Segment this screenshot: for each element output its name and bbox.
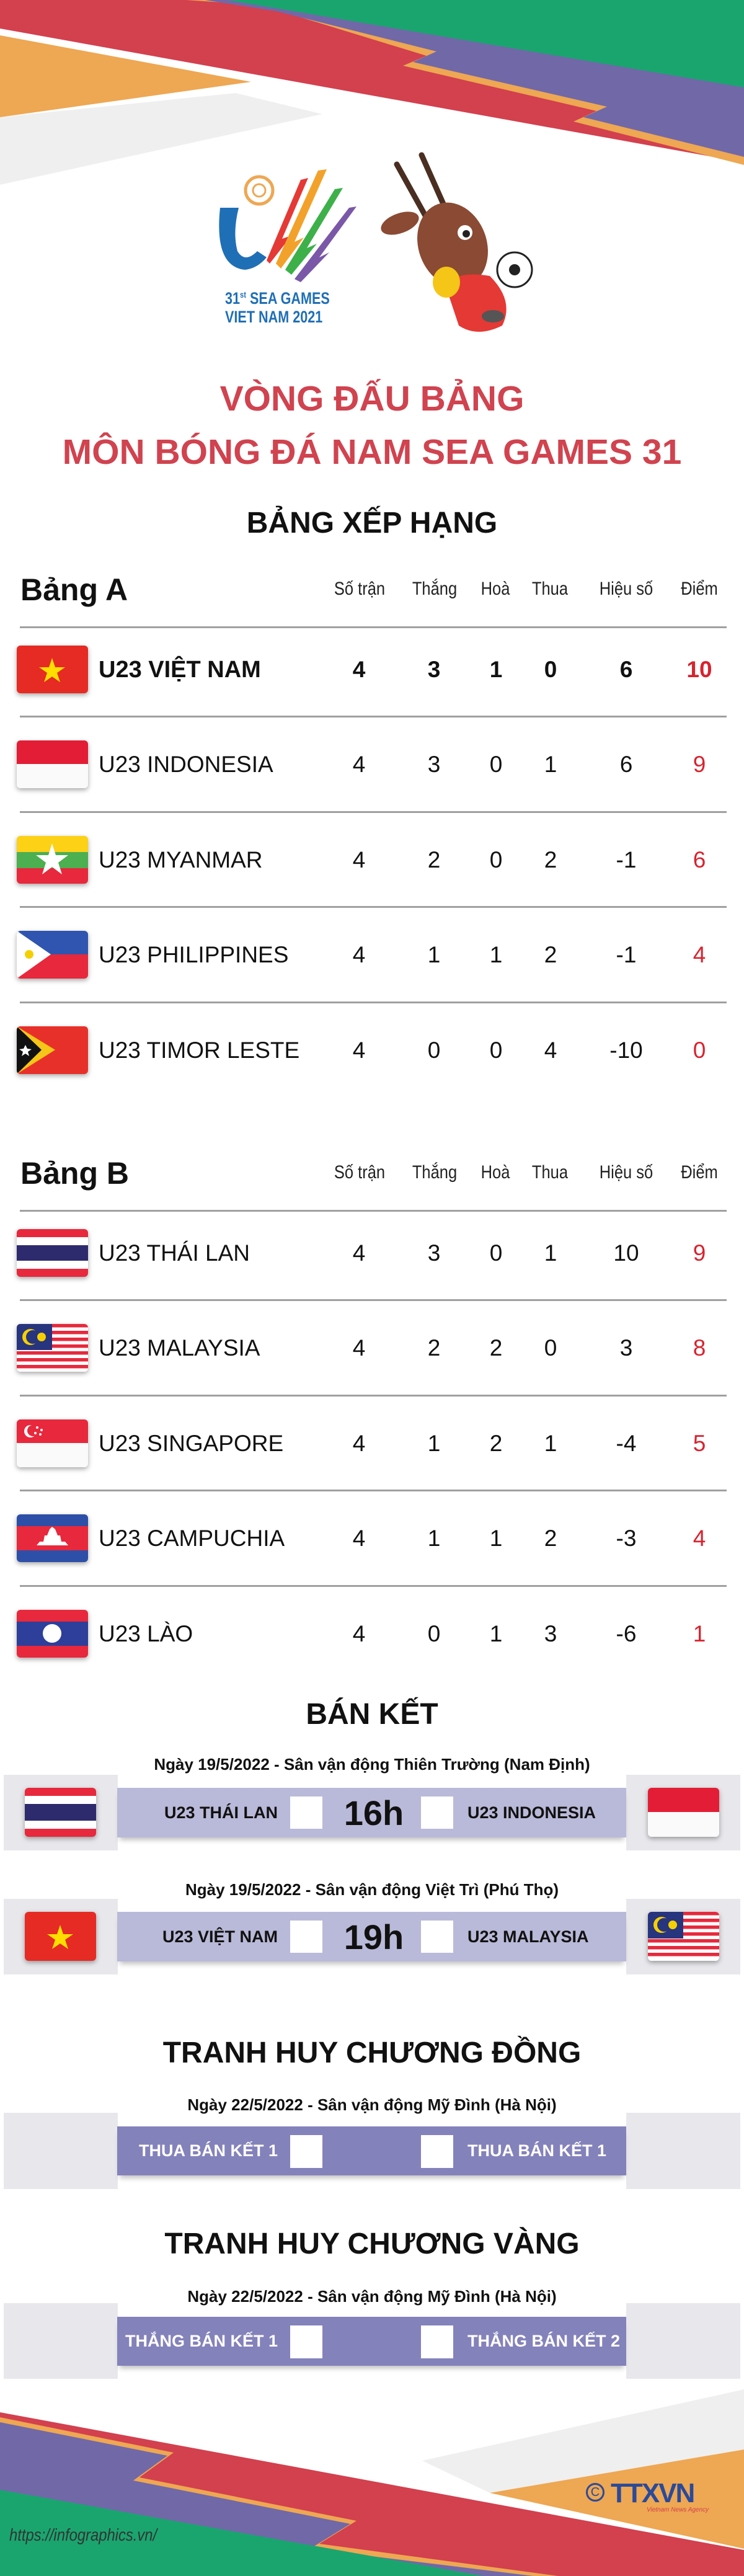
panel: semifinal 2 xyxy=(4,1880,740,1974)
column headers B: Số trận xyxy=(334,1162,385,1183)
mascot xyxy=(381,153,533,332)
row: Indonesia: 9 xyxy=(693,752,706,777)
row: Singapore: U23 SINGAPORE xyxy=(99,1431,283,1456)
column headers: Hoà xyxy=(481,579,510,599)
row: Campuchia: 1 xyxy=(490,1526,502,1551)
row: Timor Leste: -10 xyxy=(609,1037,643,1063)
row: Thai Lan xyxy=(14,1228,706,1282)
column headers B: Hiệu số xyxy=(600,1162,653,1183)
row: Timor Leste: U23 TIMOR LESTE xyxy=(99,1037,299,1063)
row: Lao: 4 xyxy=(353,1621,365,1646)
row: Philippines: 1 xyxy=(428,942,440,967)
row: Myanmar: -1 xyxy=(616,847,636,873)
panel: semifinal 1: U23 THÁI LAN xyxy=(164,1803,278,1822)
panel: gold match: THẮNG BÁN KẾT 2 xyxy=(467,2332,620,2350)
panel: bronze match xyxy=(4,2095,740,2189)
row: Malaysia: 3 xyxy=(620,1335,632,1361)
panel: group A xyxy=(20,572,718,607)
top decorative band xyxy=(0,0,744,185)
flag: Vietnam xyxy=(25,1912,96,1961)
title: VÒNG ĐẤU BẢNG xyxy=(220,379,524,419)
flag: Malaysia xyxy=(648,1912,719,1961)
row: Campuchia: 4 xyxy=(693,1526,706,1551)
row: Campuchia: 2 xyxy=(544,1526,557,1551)
row: Myanmar xyxy=(14,835,706,889)
panel: gold match xyxy=(4,2287,740,2379)
panel: semifinal 2: U23 VIỆT NAM xyxy=(162,1927,278,1946)
column headers: Hiệu số xyxy=(600,579,653,599)
column headers: Thắng xyxy=(412,579,457,599)
date/venue 1: Ngày 19/5/2022 - Sân vận động Thiên Trường (Nam Định) xyxy=(154,1755,590,1774)
row: Singapore: 1 xyxy=(428,1431,440,1456)
row: Lao: U23 LÀO xyxy=(99,1621,193,1646)
row: Singapore: 4 xyxy=(353,1431,365,1456)
row: Viet Nam: 1 xyxy=(490,657,502,682)
title: MÔN BÓNG ĐÁ NAM SEA GAMES 31 xyxy=(63,432,681,472)
column headers B: Thắng xyxy=(412,1162,457,1183)
row: Indonesia: 1 xyxy=(544,752,557,777)
date/venue bronze: Ngày 22/5/2022 - Sân vận động Mỹ Đình (Hà Nội) xyxy=(187,2095,557,2114)
heading: Bảng B: Bảng B xyxy=(20,1156,129,1191)
logo: TTXVN xyxy=(586,2478,709,2513)
column headers: Thua xyxy=(532,579,568,599)
row: Philippines: 4 xyxy=(693,942,706,967)
heading: Bảng A: Bảng A xyxy=(20,572,128,607)
row: Viet Nam: 4 xyxy=(353,657,365,682)
row: Myanmar: 2 xyxy=(544,847,557,873)
row: Singapore xyxy=(14,1418,706,1472)
row: Viet Nam: U23 VIỆT NAM xyxy=(99,657,261,683)
row: Indonesia: U23 INDONESIA xyxy=(99,752,273,777)
flag: Indonesia xyxy=(648,1788,719,1837)
logo: TTXVN: C xyxy=(591,2485,600,2499)
panel: bronze match: THUA BÁN KẾT 1 xyxy=(467,2141,606,2160)
row: Philippines: 2 xyxy=(544,942,557,967)
row: Indonesia: 3 xyxy=(428,752,440,777)
row: Campuchia: 1 xyxy=(428,1526,440,1551)
row: Lao: 0 xyxy=(428,1621,440,1646)
date/venue gold: Ngày 22/5/2022 - Sân vận động Mỹ Đình (Hà Nội) xyxy=(187,2287,557,2306)
flag: Thailand xyxy=(25,1788,96,1837)
heading: tranh huy chương vàng: TRANH HUY CHƯƠNG VÀNG xyxy=(164,2227,580,2260)
row: Thai Lan: 4 xyxy=(353,1240,365,1266)
bottom decorative band xyxy=(0,2389,744,2576)
logo: TTXVN: Vietnam News Agency xyxy=(647,2507,709,2513)
row: Indonesia: 4 xyxy=(353,752,365,777)
row: Thai Lan: 0 xyxy=(490,1240,502,1266)
row: Lao xyxy=(14,1609,706,1663)
row: Lao: 1 xyxy=(693,1621,706,1646)
row: Singapore: -4 xyxy=(616,1431,636,1456)
row: Indonesia: 6 xyxy=(620,752,632,777)
heading: bảng xếp hạng: BẢNG XẾP HẠNG xyxy=(247,507,497,540)
row: Viet Nam: 3 xyxy=(428,657,440,682)
row: Viet Nam: 6 xyxy=(620,657,632,682)
row: Campuchia: 4 xyxy=(353,1526,365,1551)
row: Thai Lan: 10 xyxy=(613,1240,639,1266)
row: Philippines: U23 PHILIPPINES xyxy=(99,942,288,967)
logo: 31st SEA Games: VIET NAM 2021 xyxy=(225,308,322,326)
column headers B xyxy=(334,1162,718,1183)
row: Campuchia xyxy=(14,1513,706,1567)
row: Lao: 1 xyxy=(490,1621,502,1646)
row: Myanmar: 0 xyxy=(490,847,502,873)
time 16h: 16h xyxy=(344,1793,404,1832)
row: Timor Leste: 0 xyxy=(490,1037,502,1063)
column headers B: Điểm xyxy=(681,1162,718,1183)
row: Philippines: -1 xyxy=(616,942,636,967)
row: Lao: 3 xyxy=(544,1621,557,1646)
row: Malaysia: 2 xyxy=(490,1335,502,1361)
row: Philippines: 4 xyxy=(353,942,365,967)
panel: group B xyxy=(20,1156,718,1191)
logo: 31st SEA Games xyxy=(219,169,356,326)
row: Indonesia xyxy=(14,739,706,793)
url footer: https://infographics.vn/ xyxy=(9,2525,157,2544)
row: Lao: -6 xyxy=(616,1621,636,1646)
row: Myanmar: 4 xyxy=(353,847,365,873)
column headers B: Thua xyxy=(532,1162,568,1183)
row: Thai Lan: 9 xyxy=(693,1240,706,1266)
column headers xyxy=(334,579,718,599)
row: Philippines: 1 xyxy=(490,942,502,967)
row: Singapore: 1 xyxy=(544,1431,557,1456)
row: Malaysia: 0 xyxy=(544,1335,557,1361)
row: Timor Leste: 4 xyxy=(544,1037,557,1063)
row: Malaysia: 4 xyxy=(353,1335,365,1361)
row: Timor Leste xyxy=(14,1025,706,1079)
panel: semifinal 1: U23 INDONESIA xyxy=(467,1803,596,1822)
column headers: Điểm xyxy=(681,579,718,599)
row: Malaysia: 8 xyxy=(693,1335,706,1361)
heading: tranh huy chương đồng: TRANH HUY CHƯƠNG ĐỒNG xyxy=(163,2036,581,2069)
row: Campuchia: -3 xyxy=(616,1526,636,1551)
row: Thai Lan: 3 xyxy=(428,1240,440,1266)
row: Myanmar: 2 xyxy=(428,847,440,873)
row: Singapore: 5 xyxy=(693,1431,706,1456)
logo: TTXVN: TTXVN xyxy=(611,2478,694,2508)
row: Campuchia: U23 CAMPUCHIA xyxy=(99,1526,285,1551)
panel: semifinal 1 xyxy=(4,1755,740,1850)
logo: 31st SEA Games: 31st SEA GAMES xyxy=(225,289,330,308)
date/venue 2: Ngày 19/5/2022 - Sân vận động Việt Trì (Phú Thọ) xyxy=(185,1880,559,1899)
row: Indonesia: 0 xyxy=(490,752,502,777)
row: Myanmar: U23 MYANMAR xyxy=(99,847,263,873)
column headers B: Hoà xyxy=(481,1162,510,1183)
row: Myanmar: 6 xyxy=(693,847,706,873)
time 19h: 19h xyxy=(344,1917,404,1956)
row: Thai Lan: 1 xyxy=(544,1240,557,1266)
row: Malaysia xyxy=(14,1323,706,1377)
panel: gold match: THẮNG BÁN KẾT 1 xyxy=(125,2332,278,2350)
row: Malaysia: 2 xyxy=(428,1335,440,1361)
row: Singapore: 2 xyxy=(490,1431,502,1456)
row: Viet Nam: 10 xyxy=(686,657,712,682)
heading: bán kết: BÁN KẾT xyxy=(306,1698,438,1731)
row: Viet Nam xyxy=(14,644,712,698)
row: Thai Lan: U23 THÁI LAN xyxy=(99,1240,250,1266)
row: Timor Leste: 0 xyxy=(428,1037,440,1063)
panel: bronze match: THUA BÁN KẾT 1 xyxy=(139,2141,278,2160)
panel: semifinal 2: U23 MALAYSIA xyxy=(467,1927,589,1946)
column headers: Số trận xyxy=(334,579,385,599)
row: Philippines xyxy=(14,930,706,984)
row: Viet Nam: 0 xyxy=(544,657,557,682)
row: Timor Leste: 4 xyxy=(353,1037,365,1063)
title xyxy=(63,379,681,472)
row: Malaysia: U23 MALAYSIA xyxy=(99,1335,260,1361)
row: Timor Leste: 0 xyxy=(693,1037,706,1063)
